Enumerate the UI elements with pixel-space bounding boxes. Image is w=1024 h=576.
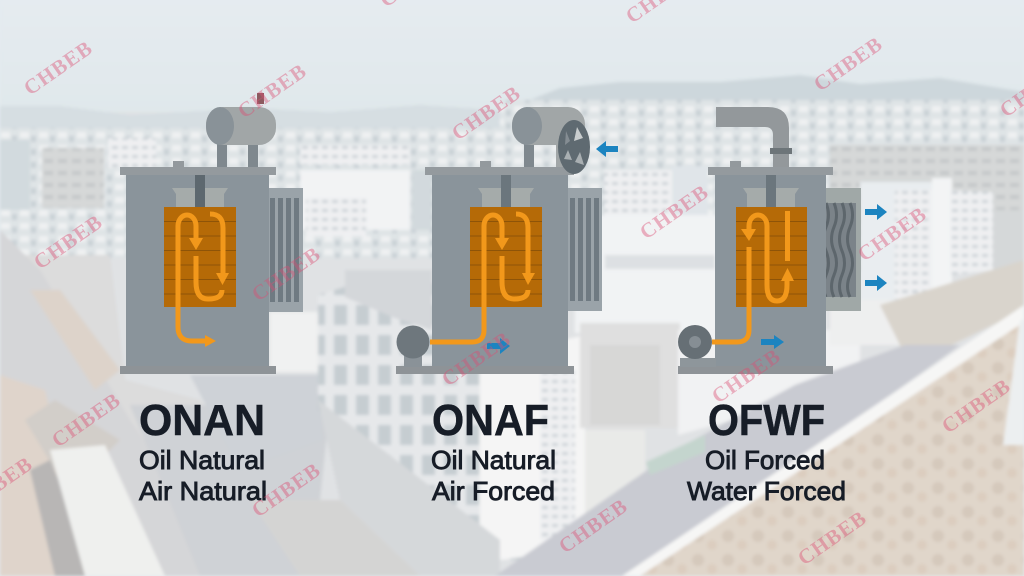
air arrow: lower bbox=[865, 275, 887, 291]
oil flow arrows bbox=[712, 211, 794, 342]
diagram: ONAN transformer bbox=[120, 93, 303, 374]
water arrow: tank bbox=[761, 335, 784, 349]
heading: ONAN: ONAN bbox=[139, 396, 265, 445]
diagonal roof and wall bbox=[495, 345, 960, 576]
conservator tank bbox=[512, 107, 585, 168]
watermarks: CHBEB: CHBEB bbox=[635, 179, 713, 244]
air arrow: intake bbox=[596, 141, 618, 157]
radiator bbox=[257, 188, 303, 312]
core bbox=[164, 207, 236, 307]
diagram: OFWF transformer bbox=[678, 107, 887, 374]
watermarks: CHBEB: CHBEB bbox=[47, 387, 125, 452]
watermarks: CHBEB: CHBEB bbox=[554, 493, 632, 558]
water pipe bbox=[716, 107, 792, 168]
watermarks: CHBEB: CHBEB bbox=[809, 31, 887, 96]
text: Oil Forced Water Forced: Oil Forced bbox=[705, 445, 825, 475]
core bbox=[470, 207, 542, 307]
heading: ONAF: ONAF bbox=[432, 396, 549, 445]
text: Oil Natural Air Forced: Air Forced bbox=[432, 476, 555, 506]
fan bbox=[558, 120, 590, 174]
text: Oil Natural Air Natural: Air Natural bbox=[139, 476, 267, 506]
core bbox=[736, 207, 807, 307]
left road and lots bbox=[0, 255, 320, 576]
watermarks: CHBEB: CHBEB bbox=[707, 343, 785, 408]
text: Oil Natural Air Forced: Oil Natural bbox=[431, 445, 556, 475]
blower motor bbox=[396, 326, 430, 358]
watermarks: CHBEB: CHBEB bbox=[29, 209, 107, 274]
text: Oil Natural Air Natural: Oil Natural bbox=[139, 445, 265, 475]
watermarks: CHBEB: CHBEB bbox=[247, 457, 325, 522]
air arrow: tank bbox=[487, 338, 510, 354]
air arrow: upper bbox=[865, 204, 887, 220]
heat exchanger bbox=[815, 188, 861, 311]
watermarks: CHBEB: CHBEB bbox=[437, 326, 515, 391]
factory bbox=[575, 215, 825, 333]
watermarks: CHBEB: CHBEB bbox=[937, 373, 1015, 438]
text: Oil Forced Water Forced: Water Forced bbox=[687, 476, 846, 506]
tank body bbox=[396, 161, 574, 374]
watermarks: CHBEB: CHBEB bbox=[19, 35, 97, 100]
diagram: ONAF transformer bbox=[396, 107, 618, 374]
central building bbox=[318, 270, 590, 560]
watermarks: CHBEB: CHBEB bbox=[233, 58, 311, 123]
text: Oil Natural Air Forced bbox=[431, 445, 556, 506]
tank body bbox=[120, 161, 276, 374]
watermarks: CHBEB: CHBEB bbox=[447, 80, 525, 145]
watermarks: CHBEB: CHBEB bbox=[853, 201, 931, 266]
text: Oil Forced Water Forced bbox=[687, 445, 846, 506]
tank body bbox=[678, 161, 833, 374]
text: Oil Natural Air Natural bbox=[139, 445, 267, 506]
heading: OFWF: OFWF bbox=[708, 396, 825, 445]
radiator bbox=[557, 188, 602, 311]
pump bbox=[678, 325, 712, 359]
watermarks: CHBEB: CHBEB bbox=[793, 505, 871, 570]
watermarks: CHBEB: CHBEB bbox=[247, 241, 325, 306]
oil flow arrows bbox=[178, 214, 229, 347]
oil flow arrows bbox=[430, 214, 535, 342]
conservator tank bbox=[206, 93, 276, 168]
